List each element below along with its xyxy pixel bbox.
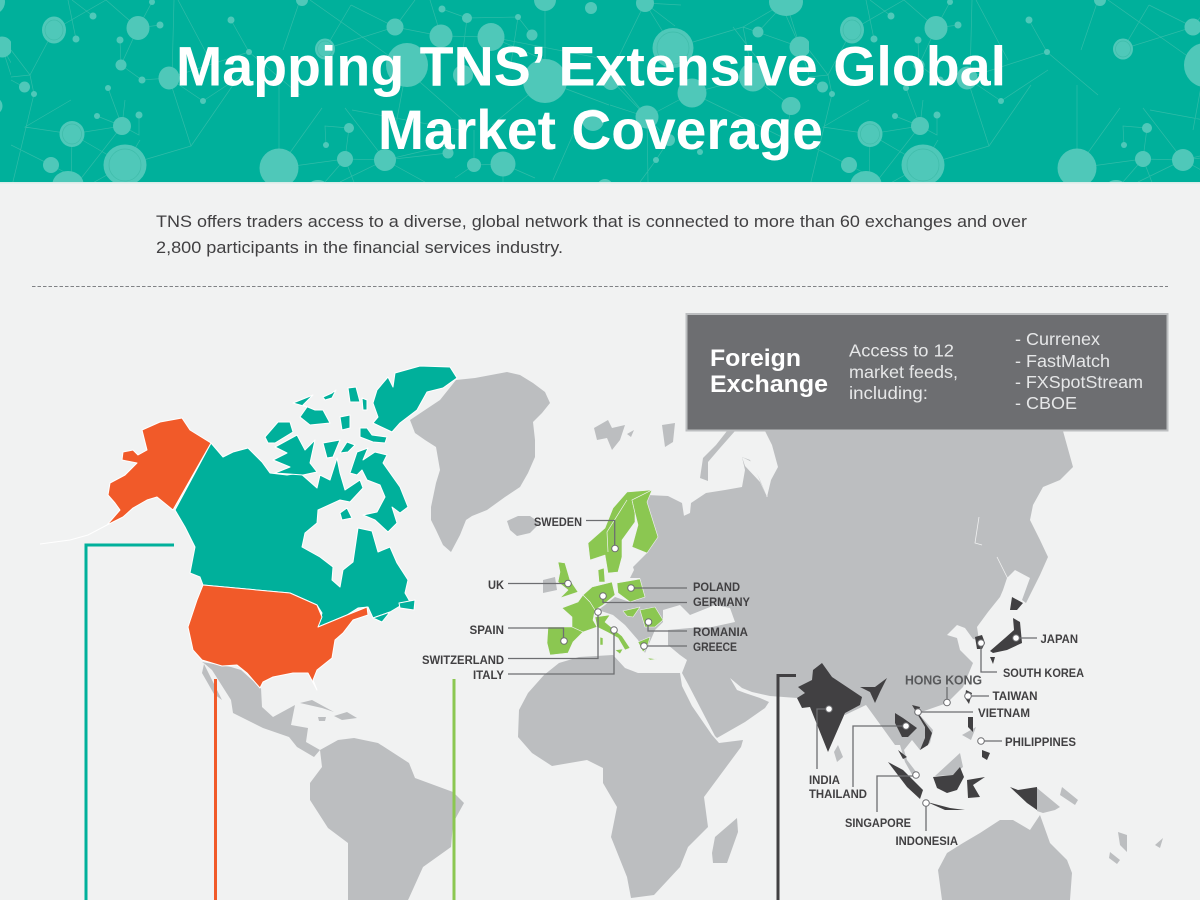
title: Mapping TNS’ Extensive Global bbox=[176, 34, 1006, 98]
Asia labels and leaders: VIETNAM bbox=[978, 706, 1030, 720]
panel description: market feeds, bbox=[849, 362, 958, 382]
Asia labels and leaders: INDIA bbox=[809, 773, 840, 787]
Contiguous United States bbox=[188, 585, 368, 690]
Greenland bbox=[410, 372, 550, 552]
Asia highlighted bbox=[797, 597, 1037, 810]
intro text: 2,800 participants in the financial services industry. bbox=[156, 238, 563, 257]
Canada mainland bbox=[175, 443, 413, 627]
Sumatra bbox=[888, 762, 923, 799]
Iceland bbox=[507, 516, 540, 536]
Africa bbox=[518, 655, 743, 898]
Norway and Sweden bbox=[588, 490, 652, 573]
Northeast India bbox=[860, 678, 887, 703]
panel feed list: - FXSpotStream bbox=[1015, 372, 1143, 392]
UK bbox=[558, 562, 578, 598]
Papua bbox=[1010, 787, 1037, 810]
title: Market Coverage bbox=[378, 98, 823, 161]
header banner with network pattern bbox=[0, 0, 1200, 198]
Pacific islands bbox=[1109, 832, 1163, 864]
Sulawesi bbox=[967, 777, 985, 798]
panel description: Access to 12 bbox=[849, 340, 954, 360]
Italy and islands bbox=[595, 615, 630, 654]
Spain and Portugal bbox=[547, 627, 583, 655]
Europe labels and leaders: SWITZERLAND bbox=[422, 653, 504, 667]
intro text bbox=[156, 212, 1027, 257]
Europe labels and leaders: ITALY bbox=[473, 668, 504, 682]
Europe labels and leaders: GREECE bbox=[693, 640, 737, 654]
panel description bbox=[849, 340, 958, 403]
Korea bbox=[975, 635, 985, 649]
Europe coloured rule bbox=[452, 679, 456, 900]
India bbox=[797, 663, 862, 752]
title bbox=[176, 34, 1006, 161]
Vietnam bbox=[912, 705, 932, 750]
Java and Lesser Sunda bbox=[927, 802, 965, 810]
Poland bbox=[617, 579, 645, 602]
Canada bbox=[175, 366, 457, 627]
Europe labels and leaders: SWEDEN bbox=[534, 515, 582, 529]
Alaska bbox=[107, 418, 211, 525]
Asia labels and leaders: TAIWAN bbox=[992, 689, 1038, 703]
Asia labels and leaders bbox=[809, 632, 1084, 848]
Europe labels and leaders: UK bbox=[488, 578, 504, 592]
intro text: TNS offers traders access to a diverse, global network that is connected to more than 60 exchanges and over bbox=[156, 212, 1027, 231]
Europe labels and leaders: SPAIN bbox=[470, 623, 504, 637]
Asia labels and leaders: THAILAND bbox=[809, 787, 867, 801]
South America bbox=[310, 738, 464, 900]
panel description: including: bbox=[849, 383, 928, 403]
Philippines bbox=[968, 717, 990, 760]
Thailand bbox=[895, 713, 917, 759]
Borneo bbox=[933, 767, 964, 793]
Europe labels and leaders: ROMANIA bbox=[693, 625, 748, 639]
Germany and Benelux bbox=[583, 582, 615, 610]
Hungary bbox=[623, 607, 640, 617]
Greece bbox=[638, 637, 657, 660]
panel heading: Exchange bbox=[710, 371, 828, 398]
Taiwan bbox=[965, 690, 972, 704]
panel feed list: - CBOE bbox=[1015, 393, 1077, 413]
Asia labels and leaders: HONG KONG bbox=[905, 672, 982, 688]
seas within Eurasia bbox=[762, 440, 1012, 587]
Sri Lanka bbox=[834, 745, 843, 762]
panel feed list: - FastMatch bbox=[1015, 351, 1110, 371]
Asia labels and leaders: SINGAPORE bbox=[845, 816, 911, 830]
Mexico and Central America bbox=[202, 662, 320, 757]
Europe highlighted bbox=[547, 490, 663, 660]
Asia labels and leaders: PHILIPPINES bbox=[1005, 735, 1076, 749]
Asia labels and leaders: JAPAN bbox=[1040, 632, 1078, 646]
Romania and Bulgaria bbox=[640, 607, 663, 627]
panel feed list: - Currenex bbox=[1015, 329, 1100, 349]
Finland bbox=[632, 490, 658, 553]
Eurasia bbox=[598, 431, 1073, 778]
Asia labels and leaders: SOUTH KOREA bbox=[1003, 666, 1084, 680]
Asia coloured rule bbox=[778, 676, 796, 900]
USA bbox=[107, 418, 368, 690]
Svalbard and Arctic islands bbox=[594, 420, 735, 481]
North America coloured rule bbox=[86, 545, 174, 900]
panel heading bbox=[710, 345, 828, 398]
Europe labels and leaders: POLAND bbox=[693, 580, 740, 594]
Borneo north and New Guinea east bbox=[935, 727, 1078, 813]
panel heading: Foreign bbox=[710, 345, 801, 372]
Arctic archipelago bbox=[265, 366, 457, 622]
Denmark bbox=[598, 568, 605, 582]
Ireland bbox=[543, 577, 557, 593]
panel: Foreign Exchange bbox=[686, 314, 1168, 430]
Madagascar bbox=[712, 818, 738, 863]
Europe labels and leaders bbox=[422, 515, 750, 682]
Caribbean islands bbox=[300, 700, 357, 721]
Australia bbox=[938, 815, 1072, 900]
Asia labels and leaders: INDONESIA bbox=[896, 834, 958, 848]
Latin America coloured rule bbox=[214, 679, 217, 900]
Japan bbox=[990, 597, 1023, 664]
France bbox=[562, 595, 597, 632]
panel feed list bbox=[1015, 329, 1143, 413]
Europe labels and leaders: GERMANY bbox=[693, 595, 750, 609]
Northern inlet bbox=[742, 457, 766, 495]
world map: grey landmasses bbox=[202, 372, 1163, 900]
